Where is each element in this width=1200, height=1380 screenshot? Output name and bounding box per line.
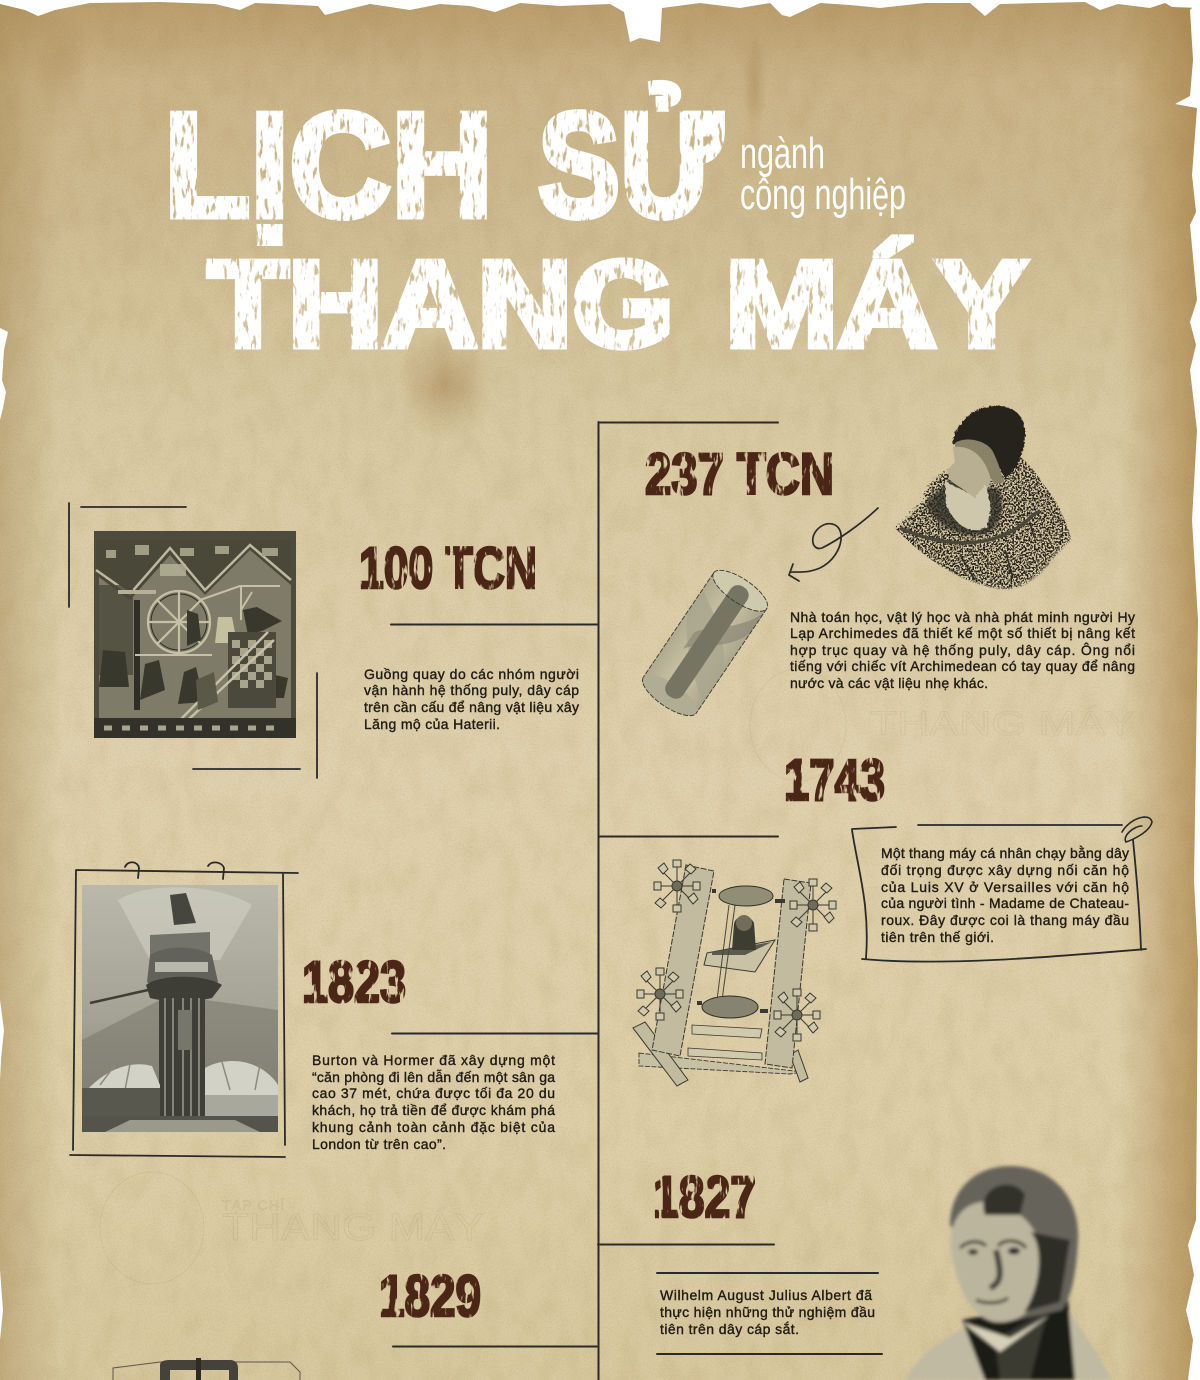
description: của người tình - Madame de Chateau- [881,895,1129,911]
year: 1827 [653,1165,756,1230]
illustration: machine top [113,1358,300,1380]
description: của Luis XV ở Versailles với căn hộ [881,879,1129,895]
description [881,845,1129,945]
year: 237 TCN [645,442,834,507]
year: 1743 [784,748,885,813]
description: khung cảnh toàn cảnh đặc biệt của [312,1119,555,1135]
description: tiên trên dây cáp sắt. [660,1321,799,1337]
connector line [392,1032,598,1034]
icon: Archimedean screw [637,563,773,723]
connector line [393,1346,597,1348]
note frame with paper clip [852,817,1152,962]
description: vận hành hệ thống puly, dây cáp [364,682,579,698]
subtitle: ngành [740,129,825,178]
frame strokes [69,503,317,778]
subtitle [740,129,906,219]
description [660,1287,875,1337]
description: Lăng mộ của Haterii. [364,716,500,732]
watermark: Tạp chí Thang máy (left) [100,1172,484,1284]
picture: medieval treadwheel crane [94,531,296,738]
year: 1823 [302,950,406,1015]
connector line [599,422,778,424]
title: MÁY [725,236,1027,372]
connector line [391,624,597,626]
description: thực hiện những thử nghiệm đầu [660,1304,875,1320]
description: Burton và Hormer đã xây dựng một [312,1052,555,1068]
description: Guồng quay do các nhóm người [364,666,579,682]
description: roux. Đây được coi là thang máy đầu [881,912,1129,928]
portrait: Archimedes [897,406,1072,590]
portrait: Wilhelm Albert [905,1166,1112,1380]
text rules [657,1273,882,1354]
subtitle: công nghiệp [740,170,906,219]
description: hợp trục quay và hệ thống puly, dây cáp. Ông nổi [790,642,1135,658]
description: nước và các vật liệu nhẹ khác. [790,675,988,691]
description: Wilhelm August Julius Albert đã [660,1287,872,1303]
description: Một thang máy cá nhân chạy bằng dây [881,845,1129,861]
description [364,666,579,732]
watermark: Tạp chí Thang máy (right): THANG MÁY [870,705,1135,743]
description: cao 37 mét, chứa được tối đa 20 du [312,1085,555,1101]
title: LỊCH [164,83,493,248]
description: khách, họ trả tiền để được khám phá [312,1102,555,1118]
description: tiếng với chiếc vít Archimedean có tay quay để nâng [790,658,1135,674]
entry: 1823 [70,862,598,1157]
year: 100 TCN [359,536,537,601]
description: Nhà toán học, vật lý học và nhà phát minh người Hy [790,609,1135,625]
entry: 237 TCN [599,406,1135,723]
description [312,1052,555,1152]
connector line [599,836,778,838]
title: THANG [208,236,674,372]
frame with hooks [70,862,298,1157]
description: London từ trên cao”. [312,1136,446,1152]
description: đối trọng được xây dựng nối căn hộ [881,862,1129,878]
watermark: Tạp chí Thang máy (left): TẠP CHÍ [222,1197,284,1213]
timeline spine [598,422,600,1380]
illustration: counterweight lift of Louis XV [633,860,836,1086]
title: SỬ [538,82,722,248]
picture: Burton and Hormer tower [82,885,278,1132]
title [164,82,1027,372]
entry: 1743 [599,748,1152,1086]
description: trên cần cấu để nâng vật liệu xây [364,699,579,715]
entry: 100 TCN [69,503,597,778]
entry: 1829 [113,1264,597,1380]
watermark: Tạp chí Thang máy (left): THANG MÁY [222,1206,484,1249]
connector line [598,1244,774,1246]
year: 1829 [379,1264,481,1329]
description: “căn phòng đi lên dẫn đến một sân ga [312,1069,555,1085]
description: tiên trên thế giới. [881,929,994,945]
entry: 1827 [598,1165,1112,1380]
arrow [789,508,878,581]
description: Lạp Archimedes đã thiết kế một số thiết bị nâng kết [790,625,1135,641]
description [790,609,1135,691]
watermark: Tạp chí Thang máy (right) [750,669,1135,781]
